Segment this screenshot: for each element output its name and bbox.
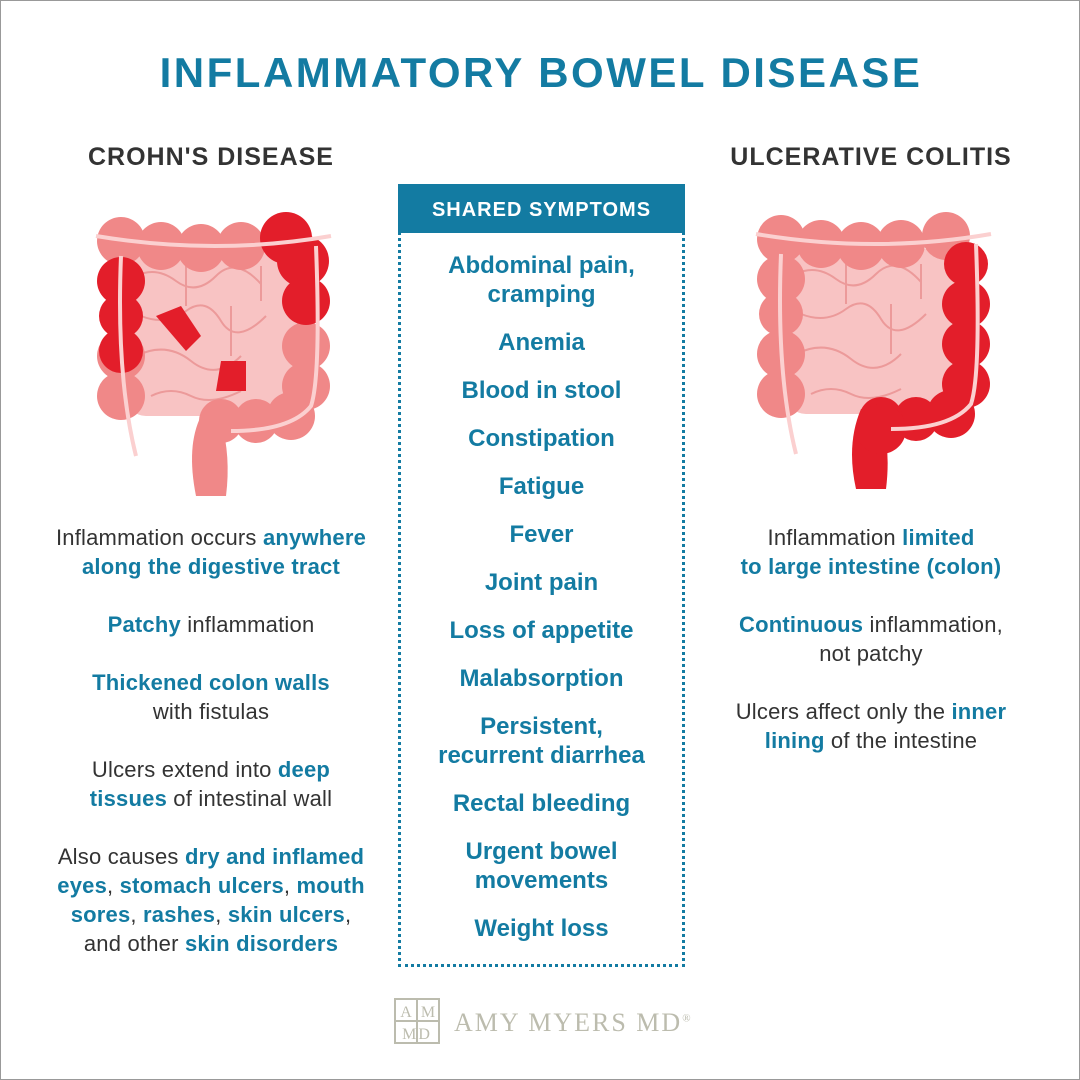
list: symptoms: Persistent, xyxy=(480,713,603,740)
list: symptoms: Fever xyxy=(509,521,574,548)
text block: crohn's facts: Ulcers extend into deep xyxy=(92,757,330,782)
text block: crohn's facts xyxy=(56,525,366,956)
text block: crohn's facts: with fistulas xyxy=(153,699,269,724)
text block: crohn's facts: along the digestive tract xyxy=(82,554,340,579)
logo: AMY MYERS MD® xyxy=(454,1008,693,1037)
text block: crohn's facts: sores, rashes, skin ulcers, xyxy=(71,902,351,927)
logo: A xyxy=(400,1004,412,1021)
list: symptoms: Blood in stool xyxy=(462,377,621,404)
list: symptoms: Malabsorption xyxy=(459,665,624,692)
list: symptoms: Fatigue xyxy=(499,473,584,500)
text block: crohn's facts: tissues of intestinal wall xyxy=(90,786,332,811)
logo xyxy=(394,998,693,1044)
list: symptoms: Loss of appetite xyxy=(449,617,634,644)
list: symptoms: Urgent bowel xyxy=(465,838,618,865)
text block: colitis facts xyxy=(736,525,1006,753)
text block: crohn's facts: and other skin disorders xyxy=(84,931,338,956)
list: symptoms: Weight loss xyxy=(474,915,609,942)
logo: MD xyxy=(402,1026,432,1043)
heading: ulcerative colitis: ULCERATIVE COLITIS xyxy=(730,143,1012,171)
logo: M xyxy=(421,1004,435,1021)
list: symptoms: Joint pain xyxy=(485,569,598,596)
text block: colitis facts: to large intestine (colon) xyxy=(741,554,1001,579)
list: symptoms: Rectal bleeding xyxy=(453,790,630,817)
text block: colitis facts: not patchy xyxy=(819,641,923,666)
list: symptoms: Abdominal pain, xyxy=(448,252,635,279)
text block: crohn's facts: Inflammation occurs anywhere xyxy=(56,525,366,550)
illustration: ulcerative colitis intestine xyxy=(756,212,992,489)
heading: shared symptoms xyxy=(398,184,685,233)
text block: crohn's facts: Patchy inflammation xyxy=(108,612,314,637)
title: INFLAMMATORY BOWEL DISEASE xyxy=(160,49,922,96)
list: symptoms xyxy=(438,252,645,942)
panel: shared symptoms border xyxy=(398,184,685,967)
list: symptoms: recurrent diarrhea xyxy=(438,742,645,769)
text block: crohn's facts: eyes, stomach ulcers, mouth xyxy=(57,873,365,898)
heading: crohn's: CROHN'S DISEASE xyxy=(88,143,334,171)
text block: colitis facts: lining of the intestine xyxy=(765,728,977,753)
list: symptoms: movements xyxy=(475,867,608,894)
text block: crohn's facts: Also causes dry and inflamed xyxy=(58,844,364,869)
list: symptoms: Anemia xyxy=(498,329,585,356)
list: symptoms: Constipation xyxy=(468,425,615,452)
text block: colitis facts: Inflammation limited xyxy=(768,525,974,550)
text block: crohn's facts: Thickened colon walls xyxy=(92,670,330,695)
heading: shared symptoms: SHARED SYMPTOMS xyxy=(432,199,651,221)
text block: colitis facts: Continuous inflammation, xyxy=(739,612,1003,637)
list: symptoms: cramping xyxy=(487,281,596,308)
illustration: crohn's intestine xyxy=(96,212,332,496)
text block: colitis facts: Ulcers affect only the inner xyxy=(736,699,1006,724)
